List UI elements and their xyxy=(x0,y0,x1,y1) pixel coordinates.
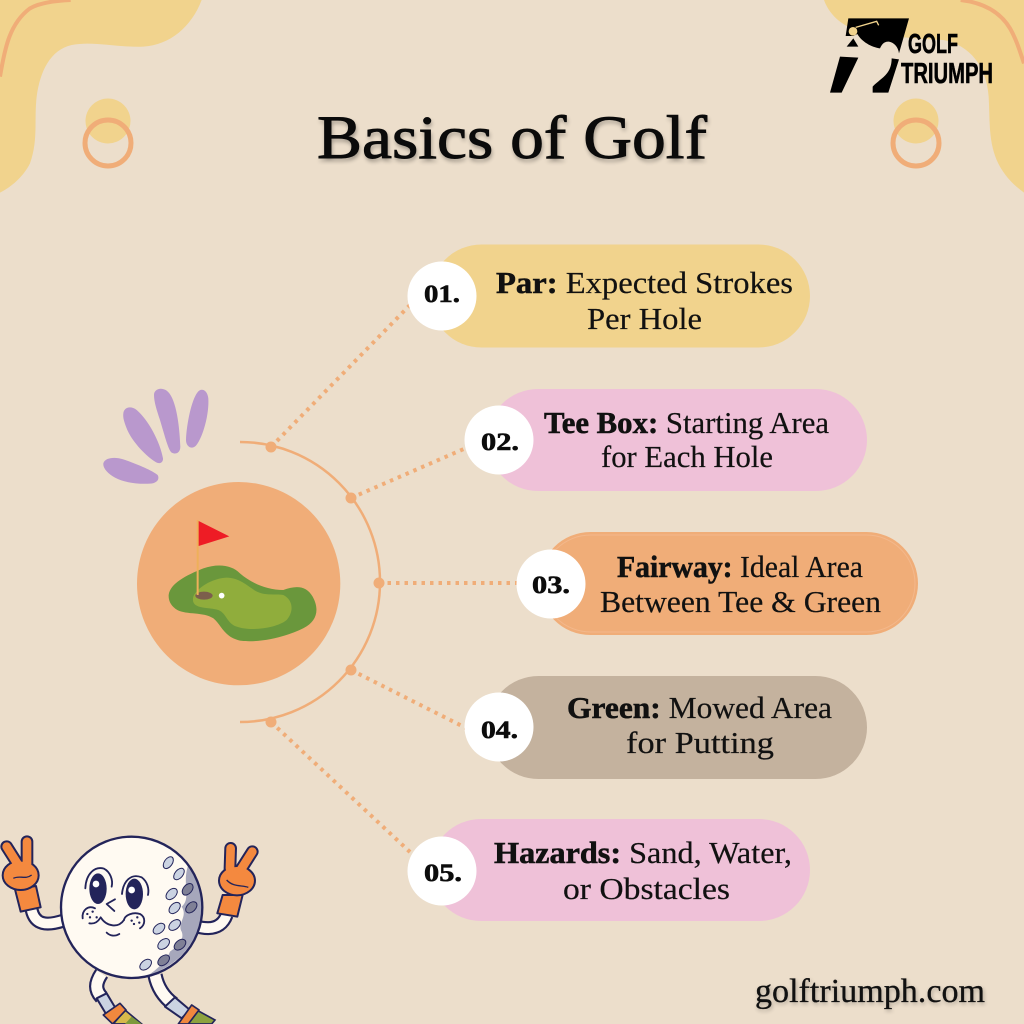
item 01: Par: Per Hole xyxy=(587,301,702,336)
number: 03. xyxy=(532,572,570,599)
text: Hazards: Sand, Water, xyxy=(494,835,792,870)
text: Green: Mowed Area xyxy=(567,690,832,725)
icon: purple burst xyxy=(103,389,208,484)
badge xyxy=(408,836,476,906)
pill xyxy=(430,819,810,921)
number: 01. xyxy=(424,281,460,308)
text: Par: Expected Strokes xyxy=(496,265,793,300)
website url: golftriumph.com xyxy=(755,973,985,1010)
item 05: Hazards xyxy=(408,819,810,921)
connector: dotted lines to the five items xyxy=(271,305,517,852)
arms xyxy=(32,910,227,928)
number: 02. xyxy=(481,429,519,456)
item 04: Green: for Putting xyxy=(626,725,774,760)
decoration: top-right ring xyxy=(893,98,939,166)
item 02: Tee Box xyxy=(464,389,867,491)
pill xyxy=(430,244,810,348)
decoration: top-right corner blob xyxy=(824,0,1024,193)
ball xyxy=(61,837,202,978)
number: 04. xyxy=(481,717,518,744)
item 02: Tee Box: for Each Hole xyxy=(601,439,773,474)
number: 05. xyxy=(424,860,462,887)
website url: golftriumph.com xyxy=(756,975,986,1012)
pill xyxy=(487,676,867,779)
item 01: Par xyxy=(408,244,810,348)
connector: arc nodes xyxy=(266,442,384,728)
dimples xyxy=(138,855,186,972)
pill xyxy=(539,532,918,635)
mascot: golf ball character xyxy=(3,837,255,1024)
badge xyxy=(464,406,534,474)
connector: curved arc xyxy=(240,442,380,722)
text: Fairway: Ideal Area xyxy=(617,549,863,584)
legs xyxy=(97,973,173,1004)
item 03: Fairway: Between Tee & Green xyxy=(600,584,882,619)
icon: golf green in orange circle xyxy=(137,482,340,685)
pill xyxy=(487,389,867,491)
item 05: Hazards: or Obstacles xyxy=(563,871,730,906)
face xyxy=(89,873,107,904)
item 03: Fairway xyxy=(516,532,918,635)
title: Basics of Golf xyxy=(317,105,708,172)
logo: Golf Triumph xyxy=(830,18,993,93)
badge xyxy=(408,262,476,330)
decoration: top-left corner blob xyxy=(0,0,202,193)
shoes and socks xyxy=(113,1010,142,1024)
left glove xyxy=(3,842,41,912)
item 04: Green xyxy=(464,676,867,779)
logo text: GOLF: GOLF xyxy=(908,28,958,59)
right glove xyxy=(217,848,255,917)
decoration: top-left ring xyxy=(85,98,131,166)
text: Tee Box: Starting Area xyxy=(544,405,829,440)
badge xyxy=(516,550,586,618)
title: Basics of Golf xyxy=(318,108,709,175)
badge xyxy=(464,692,534,762)
logo mark: golfer silhouette xyxy=(830,18,909,93)
